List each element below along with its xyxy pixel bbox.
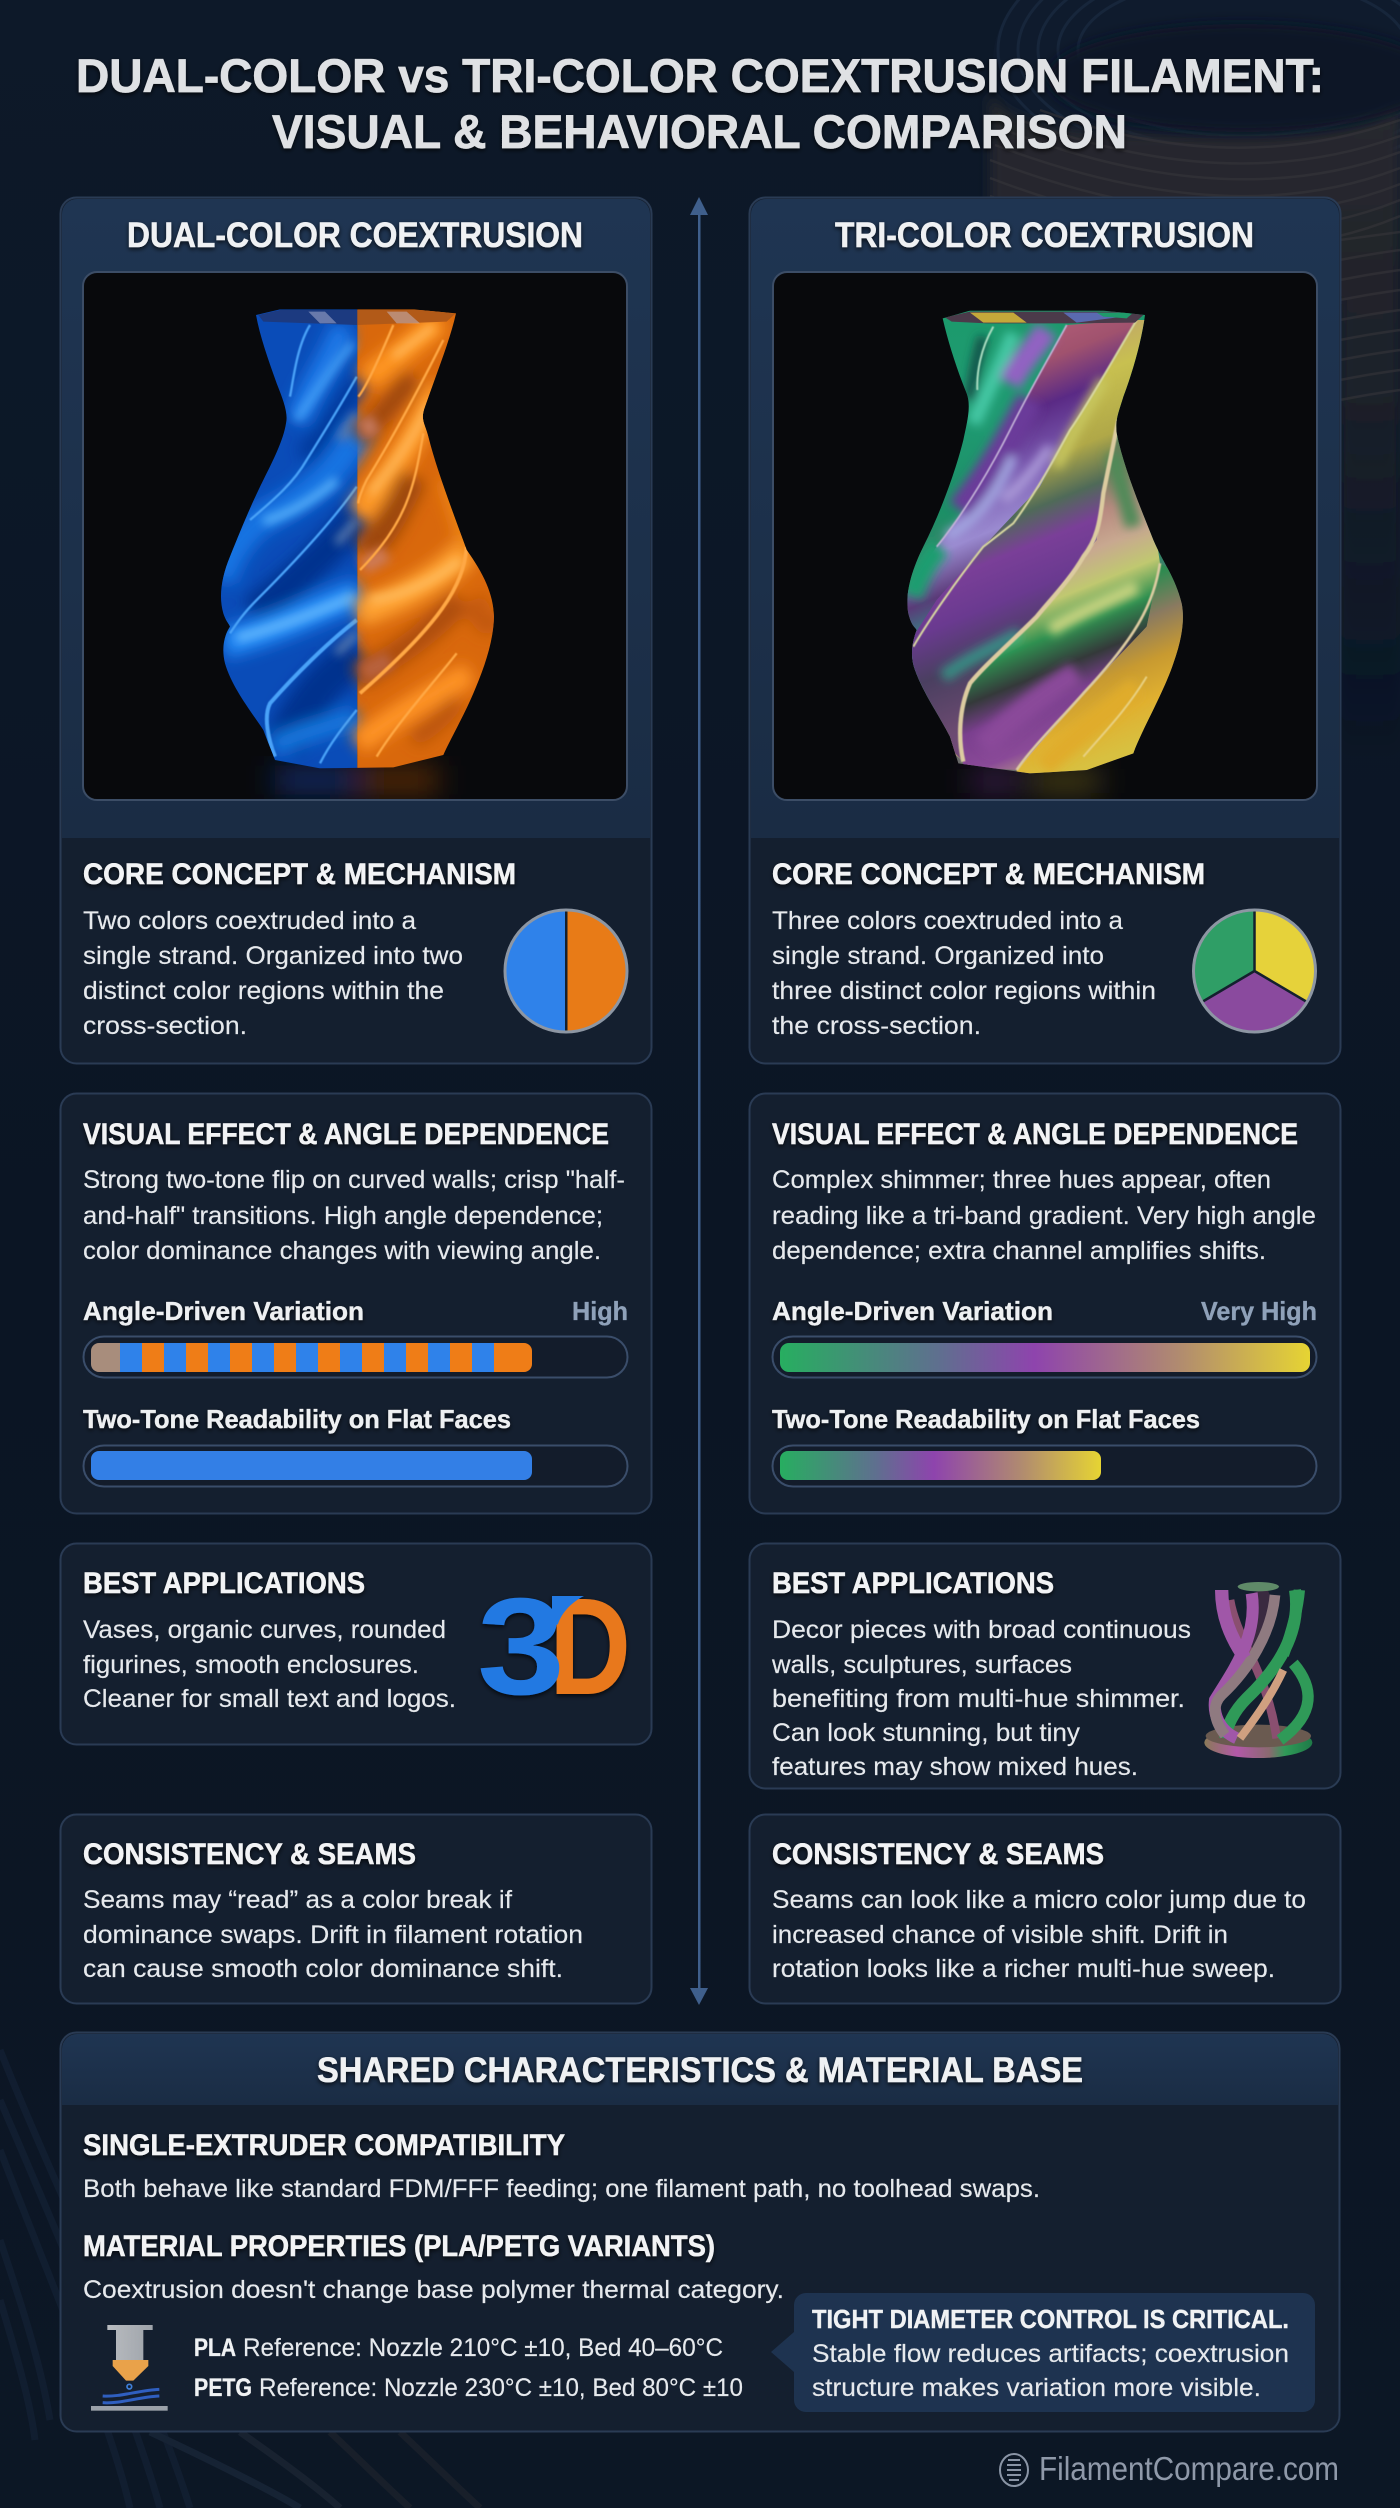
card: consistency [60,1814,652,2004]
text: visual effect body: Complex shimmer; three hues appear, often [772,1166,1271,1194]
text: PLA reference: PLA [194,2334,236,2362]
heading: tri-color coextrusion: TRI-COLOR COEXTRUSION [835,216,1254,255]
panel: dual-color best applications [60,1544,652,1744]
text: material body: Coextrusion doesn't change base polymer thermal category. [83,2276,784,2304]
heading: dual-color coextrusion: DUAL-COLOR COEXTRUSION [127,216,583,255]
center double arrow [690,197,708,2005]
bar: two-tone readability [84,1446,628,1486]
heading: single-extruder compatibility: SINGLE-EXTRUDER COMPATIBILITY [83,2129,565,2162]
bar: two-tone readability [772,1446,1316,1486]
label: two-tone readability: Two-Tone Readability on Flat Faces [83,1404,511,1434]
text: visual effect body: Strong two-tone flip on curved walls; crisp "half- [83,1166,625,1194]
label value: very high: Very High [1201,1296,1317,1326]
label value: high: High [572,1296,628,1326]
text: visual effect body: and-half" transitions. High angle dependence; [83,1202,603,1230]
card: visual effect [750,1094,1340,1514]
text: core concept body: Two colors coextruded into a [83,907,416,935]
heading: material properties: MATERIAL PROPERTIES (PLA/PETG VARIANTS) [83,2230,715,2263]
text: best applications body: figurines, smooth enclosures. [83,1651,419,1679]
heading: visual effect: VISUAL EFFECT & ANGLE DEPENDENCE [772,1118,1298,1151]
icon: two-region cross-section [505,910,627,1032]
label: angle-driven variation: Angle-Driven Variation [772,1296,1053,1326]
text: best applications body: walls, sculptures, surfaces [771,1651,1072,1679]
card: dual-color background [60,198,652,1064]
text: consistency body [83,1886,583,1983]
heading: consistency and seams: CONSISTENCY & SEAMS [83,1838,416,1871]
text: best applications body [771,1616,1191,1781]
panel: dual-color column [60,198,652,1064]
panel: dual-color visual effect [60,1094,652,1514]
icon: brand logo [1000,2454,1028,2486]
bar: angle-driven variation [84,1336,628,1378]
title [76,49,1324,158]
band C lower wedge [907,320,1153,762]
panel: dual-color consistency [60,1814,652,2004]
text: best applications body: features may show mixed hues. [772,1753,1138,1781]
label: angle-driven variation: Angle-Driven Variation [83,1296,364,1326]
heading: visual effect: VISUAL EFFECT & ANGLE DEPENDENCE [83,1118,609,1151]
text: core concept body: cross-section. [83,1012,247,1040]
text: best applications body [83,1616,456,1713]
orange shading [358,320,490,743]
footer: brand [1000,2450,1339,2487]
heading: consistency and seams: CONSISTENCY & SEAMS [772,1838,1104,1871]
text: brand name: FilamentCompare.com [1039,2450,1339,2487]
text: consistency body: increased chance of visible shift. Drift in [772,1921,1228,1949]
text: consistency body: Seams may “read” as a color break if [83,1886,512,1914]
callout: tight diameter control [771,2293,1315,2412]
cross highlights [912,330,1137,767]
image frame [83,272,627,800]
heading: core concept: CORE CONCEPT & MECHANISM [772,858,1205,891]
heading: best applications: BEST APPLICATIONS [772,1567,1054,1600]
image: dual-color vase [83,272,627,800]
icon: twisted tower [1204,1582,1312,1758]
text: visual effect body: color dominance changes with viewing angle. [83,1237,601,1265]
filament strands backdrop [0,2050,480,2508]
text: best applications body: benefiting from multi-hue shimmer. [772,1685,1185,1713]
rim [945,312,1143,323]
section: core concept [772,858,1316,1040]
text: consistency body: can cause smooth color dominance shift. [83,1955,563,1983]
callout: tight diameter control: structure makes variation more visible. [812,2374,1261,2402]
text: core concept body: single strand. Organized into two [83,942,463,970]
icon: 3D logo: 3 [477,1570,565,1724]
label: two-tone readability: Two-Tone Readability on Flat Faces [772,1404,1200,1434]
panel header: tri-color [751,199,1339,838]
icon: three-region cross-section [1194,910,1316,1032]
text: consistency body: rotation looks like a richer multi-hue sweep. [772,1955,1275,1983]
text: core concept body: the cross-section. [772,1012,981,1040]
heading: shared characteristics: SHARED CHARACTERISTICS & MATERIAL BASE [317,2051,1083,2090]
heading: best applications: BEST APPLICATIONS [83,1567,365,1600]
icon: printing nozzle [91,2325,168,2411]
filament spool backdrop [990,0,1400,760]
heading: core concept: CORE CONCEPT & MECHANISM [83,858,516,891]
text: PETG reference: PETG [194,2374,252,2402]
text: visual effect body [772,1166,1316,1265]
text: PLA reference: Reference: Nozzle 210°C ±10, Bed 40–60°C [243,2334,723,2362]
text: best applications body: Cleaner for small text and logos. [83,1685,456,1713]
text: best applications body: Can look stunning, but tiny [772,1719,1081,1747]
text: best applications body: Vases, organic curves, rounded [83,1616,446,1644]
card: shared background [60,2032,1340,2432]
text: consistency body [772,1886,1306,1983]
rim opening [258,310,357,325]
icon: 3D logo [477,1570,631,1724]
card: tri-color background [750,198,1340,1064]
panel: tri-color best applications [750,1544,1340,1788]
text: visual effect body [83,1166,625,1265]
text: core concept body [83,907,463,1040]
panel header: shared [62,2034,1338,2105]
panel: tri-color consistency [750,1814,1340,2004]
text: core concept body [772,907,1156,1040]
title: DUAL-COLOR vs TRI-COLOR COEXTRUSION FILAMENT: [76,49,1324,102]
text: visual effect body: dependence; extra channel amplifies shifts. [772,1237,1266,1265]
text: consistency body: dominance swaps. Drift in filament rotation [83,1921,583,1949]
text: core concept body: Three colors coextruded into a [772,907,1123,935]
band B (left) [907,310,1183,774]
callout: tight diameter control: Stable flow reduces artifacts; coextrusion [812,2340,1289,2368]
text: core concept body: single strand. Organized into [772,942,1104,970]
callout: tight diameter control: TIGHT DIAMETER CONTROL IS CRITICAL. [812,2304,1289,2334]
section: core concept [83,858,627,1040]
text: visual effect body: reading like a tri-band gradient. Very high angle [772,1202,1316,1230]
image: tri-color vase [773,272,1317,800]
panel: shared characteristics [60,2032,1340,2432]
panel: tri-color visual effect [750,1094,1340,1514]
text: best applications body: Decor pieces with broad continuous [772,1616,1191,1644]
panel header: dual-color [62,199,650,838]
band C [903,320,1137,767]
panel: tri-color column [750,198,1340,1064]
text: core concept body: three distinct color regions within [772,977,1156,1005]
text: core concept body: distinct color regions within the [83,977,444,1005]
image frame [773,272,1317,800]
card: best applications [750,1544,1340,1788]
title: VISUAL & BEHAVIORAL COMPARISON [272,105,1127,158]
ridges [913,320,1160,770]
text: PETG reference: Reference: Nozzle 230°C ±10, Bed 80°C ±10 [259,2374,743,2402]
blue shading [220,327,360,747]
text: consistency body: Seams can look like a micro color jump due to [772,1886,1306,1914]
bar: angle-driven variation [772,1336,1316,1378]
icon: 3D logo: D [549,1570,631,1724]
card: best applications [60,1544,652,1744]
card: consistency [750,1814,1340,2004]
text: single-extruder body: Both behave like standard FDM/FFF feeding; one filament path, no toolhead swaps. [83,2175,1040,2203]
card: visual effect [60,1094,652,1514]
